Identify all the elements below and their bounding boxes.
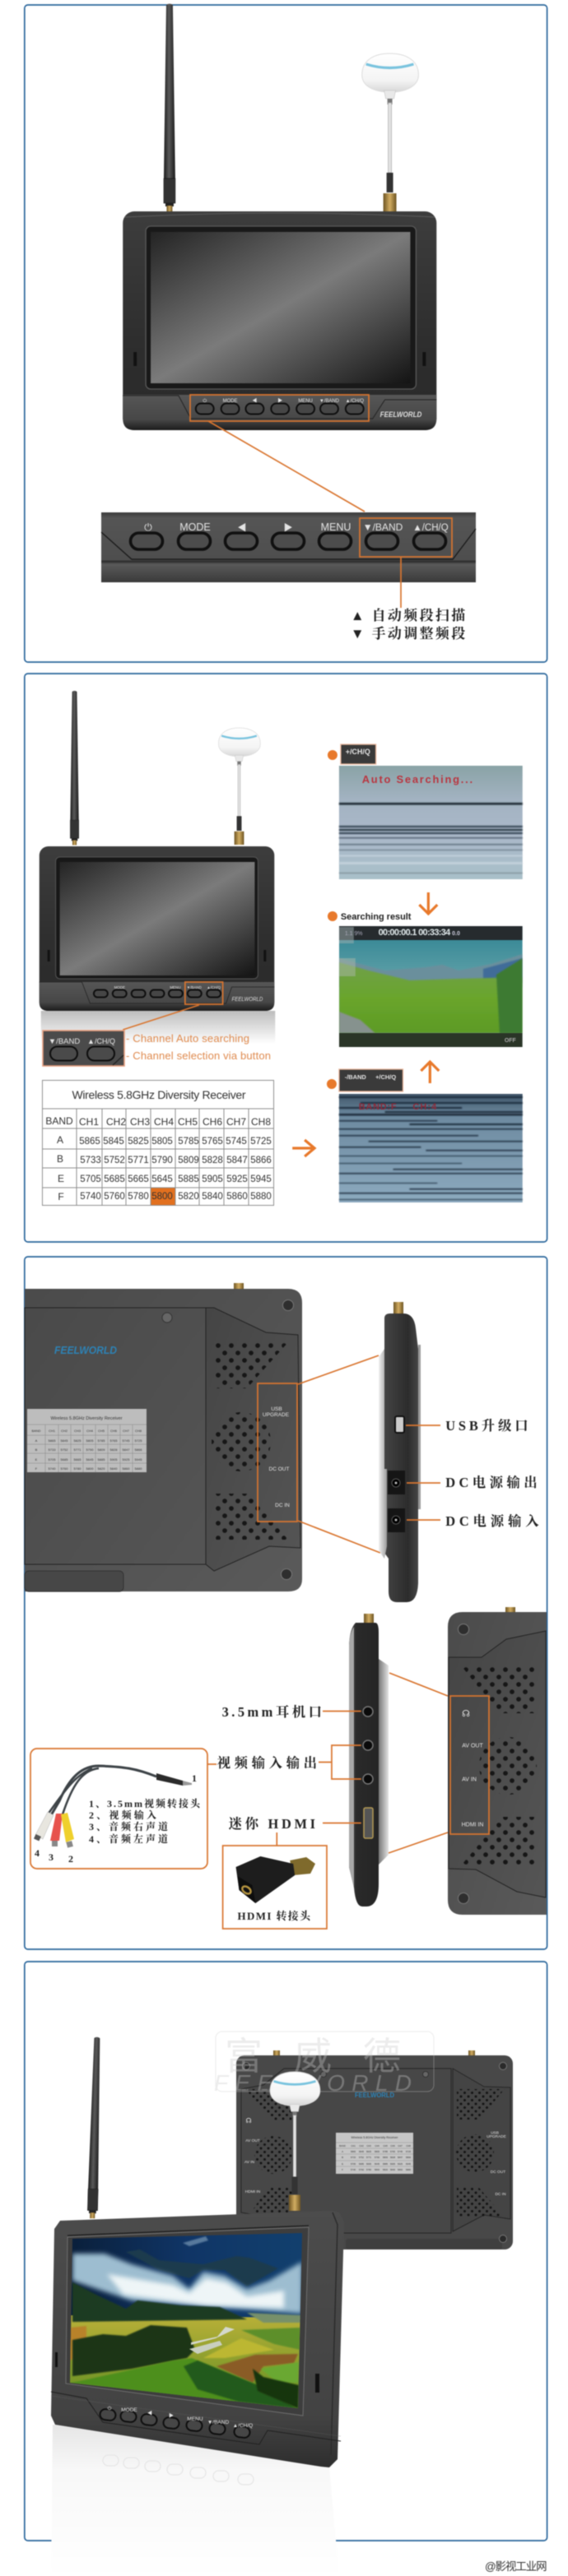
spec label: A: [342, 2150, 343, 2153]
cable legend: 2、视频输入: [89, 1809, 156, 1821]
leaders: rear right to side view: [389, 1673, 448, 1853]
screen: searching result: 00:00:00.1 00:33:34: [379, 928, 451, 938]
spec label: 5825: [74, 1439, 81, 1443]
label: mini hdmi: 迷你 HDMI: [229, 1816, 315, 1832]
spec label: 5685: [359, 2162, 365, 2166]
callout: highlight on BAND CH: [185, 982, 223, 1004]
buttons: ◀: [147, 2411, 152, 2416]
spec label: BAND: [339, 2144, 346, 2147]
monitor back small: [236, 2050, 513, 2249]
usb port: [395, 1416, 404, 1433]
panel: channel searching: [25, 674, 547, 1242]
button strip enlarged: MODE: [179, 521, 211, 533]
screen: searching result: 0.0: [452, 931, 460, 937]
spec label: 5925: [123, 1457, 130, 1462]
spec label: [336, 2133, 413, 2174]
spec label: 5733: [49, 1448, 56, 1452]
callout: AV cable box: [30, 1749, 216, 1869]
monitor back small: DC IN: [495, 2192, 506, 2197]
spec label: 5745: [398, 2150, 403, 2153]
monitor back small: USB: [491, 2130, 499, 2135]
spec label: 5740: [351, 2168, 356, 2171]
spec label: CH5: [98, 1429, 105, 1433]
monitor back: right: AV OUT: [462, 1744, 483, 1749]
button strip enlarged: ▶: [284, 522, 293, 533]
cable legend: 4、音频左声道: [89, 1832, 168, 1845]
spec label: CH6: [390, 2144, 395, 2147]
icon: AV cable: [34, 1766, 192, 1848]
panel: product overview: [25, 1962, 547, 2576]
table: channels: 5847: [226, 1156, 248, 1165]
spec label: 5805: [375, 2150, 380, 2153]
buttons: ⏻: [108, 2406, 112, 2412]
callout: rear port highlight: [258, 1383, 297, 1522]
screen: [60, 862, 254, 975]
spec label: 5785: [98, 1439, 105, 1443]
spec label: 5800: [86, 1466, 94, 1471]
spec label: 5945: [135, 1457, 142, 1462]
monitor front: MENU: [298, 399, 313, 404]
spec label: 5805: [86, 1439, 94, 1443]
caption: english descriptions: - Channel Auto searching: [126, 1032, 249, 1045]
callout: button highlight box: [190, 395, 369, 421]
spec label: 5790: [86, 1448, 94, 1452]
spec label: CH3: [366, 2144, 371, 2147]
spec label: 5820: [98, 1466, 105, 1471]
table: channels: 5765: [202, 1137, 223, 1147]
spec label: 5645: [375, 2162, 380, 2166]
step 3 tag: [327, 1069, 403, 1091]
spec label: B: [342, 2156, 343, 2159]
monitor back small: ☊: [245, 2117, 252, 2124]
spec label: CH4: [86, 1429, 94, 1433]
table: channels: 5805: [151, 1137, 173, 1147]
step 3 tag: +/CH/Q: [375, 1073, 396, 1081]
table: channels: CH4: [154, 1116, 174, 1128]
monitor back: left: DC IN: [275, 1503, 290, 1508]
spec label: 5865: [351, 2150, 356, 2153]
table: channels: 5745: [226, 1137, 247, 1147]
icon: whip antenna: [87, 2037, 102, 2218]
spec label: 5725: [406, 2150, 412, 2153]
buttons: ▼/BAND: [207, 2420, 229, 2425]
table: channels: CH6: [203, 1116, 222, 1128]
screen: auto searching: Auto Searching...: [362, 773, 473, 785]
leaders: side port labels: [406, 1425, 440, 1520]
table: channels: 5925: [226, 1174, 248, 1184]
screen: landscape: [69, 2232, 305, 2410]
spec label: 5800: [375, 2168, 380, 2171]
monitor back small: FEELWORLD: [355, 2092, 394, 2099]
spec label: Wireless 5.8GHz Diversity Receiver: [50, 1416, 123, 1421]
screen: [151, 232, 410, 383]
cable legend: 3、音频右声道: [89, 1820, 168, 1832]
table: channels: 5752: [104, 1156, 125, 1165]
table: channels: 5820: [178, 1192, 199, 1202]
spec label: 5885: [383, 2162, 389, 2166]
screen: auto searching: [339, 766, 523, 879]
table: channels: 5785: [178, 1137, 199, 1147]
spec label: CH4: [375, 2144, 379, 2147]
table: channels: 5825: [128, 1137, 149, 1147]
spec label: 5765: [110, 1439, 118, 1443]
zoomed buttons: [43, 1031, 124, 1066]
monitor front: [123, 211, 436, 430]
spec label: 5725: [135, 1439, 142, 1443]
monitor front: ⏻: [203, 398, 207, 404]
spec label: F: [342, 2168, 343, 2171]
label: mini hdmi: [229, 1816, 361, 1846]
monitor front: ▲/CH/Q: [346, 399, 364, 404]
monitor back: left: FEELWORLD: [54, 1344, 118, 1356]
spec label: 5645: [86, 1457, 94, 1462]
spec label: CH3: [74, 1429, 81, 1433]
spec label: 5905: [390, 2162, 396, 2166]
screen: manual band channel: BAND:F: [359, 1102, 397, 1112]
spec label: 5809: [98, 1448, 105, 1452]
hdmi port: [364, 1808, 373, 1838]
table: channels: 5945: [250, 1174, 272, 1184]
table: channels: CH3: [130, 1116, 150, 1128]
button strip enlarged: ⏻: [144, 521, 152, 533]
monitor back: left: UPGRADE: [263, 1412, 290, 1418]
spec label: CH7: [123, 1429, 130, 1433]
screen: searching result: 1.1 9%: [345, 931, 363, 937]
spec label: 5845: [359, 2150, 365, 2153]
spec label: 5780: [366, 2168, 372, 2171]
icon: whip antenna: [164, 3, 175, 212]
buttons: [100, 2406, 253, 2439]
spec label: CH8: [406, 2144, 411, 2147]
spec label: 5945: [406, 2162, 412, 2166]
step 1 tag: +/CH/Q: [346, 748, 370, 756]
spec label: 5685: [61, 1457, 68, 1462]
buttons: ▲/CH/Q: [233, 2423, 253, 2429]
spec label: 5705: [49, 1457, 56, 1462]
icon: mushroom antenna: [218, 728, 260, 845]
cable legend: [89, 1797, 201, 1845]
table: channels: 5828: [202, 1156, 223, 1165]
screen: searching result: [339, 926, 523, 1047]
spec label: 5847: [123, 1448, 130, 1452]
table: channels: 5771: [128, 1156, 149, 1165]
spec label: 5925: [398, 2162, 403, 2166]
spec label: 5880: [406, 2168, 412, 2171]
button strip enlarged: MENU: [321, 521, 351, 533]
callout: AV cable box: 1: [192, 1772, 197, 1784]
table: channels: 5780: [128, 1192, 149, 1202]
table: channels: 5760: [104, 1192, 125, 1202]
panel: front view with button strip: [25, 3, 547, 662]
audio video jacks: [363, 1707, 373, 1717]
panel: ports: [25, 1257, 547, 1949]
spec label: 5785: [383, 2150, 389, 2153]
screen: manual band channel: [339, 1094, 523, 1202]
monitor front: ▲/CH/Q: [207, 985, 221, 989]
spec label: E: [35, 1457, 38, 1462]
table: channels: CH5: [178, 1116, 198, 1128]
icon: mushroom antenna: [362, 53, 418, 211]
spec label: 5845: [61, 1439, 68, 1443]
table: channels: 5725: [250, 1137, 272, 1147]
table: channels: 5885: [178, 1174, 199, 1184]
monitor back small: HDMI IN: [245, 2189, 261, 2194]
monitor back: right: AV IN: [462, 1777, 477, 1782]
battery cover: [25, 1308, 206, 1564]
icon: HDMI adapter: [236, 1856, 315, 1903]
spec label: 5665: [366, 2162, 372, 2166]
table: channels: BAND: [45, 1115, 73, 1127]
spec label: 5828: [390, 2156, 396, 2159]
spec label: 5866: [406, 2156, 412, 2159]
step 3 tag: -/BAND: [345, 1073, 366, 1081]
table: channels: 5809: [178, 1156, 199, 1165]
table: channels: A: [57, 1134, 63, 1146]
step 1 tag: [328, 744, 376, 764]
table: channels: CH8: [251, 1116, 271, 1128]
spec label: BAND: [31, 1429, 41, 1433]
buttons: ▶: [169, 2413, 174, 2419]
table: channels: 5740: [80, 1192, 101, 1202]
monitor front: FEELWORLD: [380, 410, 422, 419]
caption: english descriptions: [126, 1032, 271, 1062]
table: channels: E: [58, 1173, 64, 1184]
spec label: 5765: [390, 2150, 396, 2153]
button strip enlarged: ◀: [238, 522, 247, 533]
icon: mushroom antenna: [270, 2072, 320, 2211]
callout: HDMI adapter box: HDMI 转接头: [238, 1910, 311, 1922]
label: video in out: 视频输入输出: [217, 1755, 317, 1771]
caption: button functions: ▲ 自动频段扫描: [351, 607, 465, 623]
spec label: 5840: [390, 2168, 396, 2171]
button strip enlarged: [101, 512, 476, 582]
table: channels: 5665: [128, 1174, 149, 1184]
monitor front: FEELWORLD: [232, 997, 263, 1003]
spec label: 5665: [74, 1457, 81, 1462]
table: channels: 5685: [104, 1174, 125, 1184]
button strip enlarged: ▲/CH/Q: [412, 523, 449, 533]
label: DC in: DC电源输入: [445, 1513, 539, 1529]
table: channels: CH1: [79, 1116, 99, 1128]
spec label: 5771: [366, 2156, 372, 2159]
spec label: F: [35, 1466, 38, 1471]
table: channels: B: [57, 1153, 63, 1165]
monitor front: ▼/BAND: [187, 985, 203, 989]
monitor back: right: ☊: [462, 1709, 470, 1719]
zoomed buttons: ▼/BAND: [49, 1037, 80, 1046]
caption: english descriptions: - Channel selection via button: [126, 1049, 271, 1062]
monitor back: right: HDMI IN: [462, 1823, 483, 1828]
table: channels: F: [58, 1191, 64, 1202]
monitor front: MODE: [223, 399, 238, 404]
table: channels: CH2: [106, 1116, 126, 1128]
monitor back small: AV IN: [244, 2160, 255, 2165]
arrow: connector to strip: [208, 421, 365, 512]
watermark: brand: [214, 2032, 434, 2096]
spec label: 5820: [383, 2168, 389, 2171]
watermark: brand: 富威德: [225, 2035, 401, 2078]
arrow: up: [421, 1062, 439, 1083]
table: channels: 5705: [80, 1174, 101, 1184]
table: channels: 5880: [250, 1192, 272, 1202]
monitor back: left: [25, 1283, 302, 1591]
spec label: 5828: [110, 1448, 118, 1452]
monitor front: ◀: [252, 398, 257, 404]
spec label: 5840: [110, 1466, 118, 1471]
spec label: 5780: [74, 1466, 81, 1471]
label: DC out: DC电源输出: [445, 1475, 538, 1490]
monitor front: ▶: [277, 398, 282, 404]
screen: manual band channel: CH:4: [412, 1102, 437, 1112]
monitor front large: [51, 2211, 344, 2467]
spec label: 5860: [398, 2168, 403, 2171]
monitor side view: right: [379, 1302, 421, 1602]
callout: AV cable box: 2: [68, 1853, 73, 1865]
spec label: CH5: [383, 2144, 388, 2147]
monitor back small: AV OUT: [245, 2138, 260, 2143]
spec label: E: [342, 2162, 343, 2166]
callout: HDMI adapter box: [223, 1846, 327, 1929]
spec label: CH6: [110, 1429, 118, 1433]
monitor side view: left: [349, 1614, 389, 1907]
monitor front: [40, 846, 274, 1011]
spec label: 5880: [135, 1466, 142, 1471]
monitor back: left: USB: [271, 1406, 282, 1412]
monitor front: ▼/BAND: [319, 399, 340, 404]
spec label: 5866: [135, 1448, 142, 1452]
dc jacks: [388, 1471, 405, 1494]
label: headphone: 3.5mm耳机口: [222, 1704, 322, 1720]
spec label: 5752: [359, 2156, 365, 2159]
icon: whip antenna: [70, 691, 79, 845]
spec label: 5790: [375, 2156, 380, 2159]
monitor front: MODE: [114, 985, 125, 989]
table: channels: CH7: [226, 1116, 246, 1128]
callout: AV cable box: 3: [49, 1851, 54, 1863]
arrow: table to screens: [292, 1140, 314, 1156]
label: video in out: [217, 1745, 361, 1779]
callout: BAND CH highlight: [360, 518, 452, 557]
spec label: 5760: [61, 1466, 68, 1471]
watermark: site credit: @影视工业网: [485, 2560, 547, 2573]
spec label: A: [35, 1439, 38, 1443]
callout: AV cable box: 4: [35, 1847, 40, 1859]
arrow: leader to caption: [400, 557, 402, 608]
watermark: brand: FEELWORLD: [214, 2070, 412, 2096]
spec label: 5771: [74, 1448, 81, 1452]
caption: button functions: [351, 607, 465, 642]
screen: searching result: OFF: [505, 1038, 516, 1044]
spec label: CH2: [359, 2144, 364, 2147]
spec label: CH2: [61, 1429, 68, 1433]
monitor back small: DC OUT: [491, 2170, 505, 2175]
caption: button functions: ▼ 手动调整频段: [351, 625, 465, 642]
reflection: [51, 2425, 339, 2576]
buttons: MENU: [187, 2416, 203, 2422]
buttons: MODE: [121, 2407, 137, 2413]
table: channels: 5905: [202, 1174, 223, 1184]
spec label: CH7: [398, 2144, 403, 2147]
spec label: [27, 1409, 147, 1472]
speaker grille: [462, 1666, 537, 1865]
spec label: 5825: [366, 2150, 372, 2153]
step 2 label: Searching result: [341, 912, 412, 922]
spec label: CH1: [49, 1429, 56, 1433]
spec label: 5885: [98, 1457, 105, 1462]
monitor back: left: DC OUT: [269, 1466, 289, 1472]
table: channels: 5800: [151, 1192, 173, 1202]
table: channels: 5840: [202, 1192, 223, 1202]
table: channels: Wireless 5.8GHz Diversity Receiver: [72, 1088, 246, 1101]
arrow: down: [419, 892, 437, 914]
spec label: 5847: [398, 2156, 403, 2159]
spec label: 5752: [61, 1448, 68, 1452]
table: channels: 5790: [151, 1156, 173, 1165]
table: channels: 5865: [79, 1137, 100, 1147]
table: channels: 5645: [151, 1174, 173, 1184]
spec label: 5860: [123, 1466, 130, 1471]
table: channels: [43, 1081, 274, 1206]
label: USB: USB升级口: [445, 1418, 528, 1434]
spec label: 5760: [359, 2168, 365, 2171]
callout: side port highlight: [450, 1696, 489, 1834]
monitor back small: UPGRADE: [487, 2134, 506, 2139]
reflection: [41, 1011, 275, 1044]
leaders: rear to side view: [298, 1355, 380, 1553]
spec label: 5809: [383, 2156, 389, 2159]
spec label: CH1: [351, 2144, 356, 2147]
zoomed buttons: ▲/CH/Q: [87, 1037, 115, 1045]
spec label: Wireless 5.8GHz Diversity Receiver: [352, 2136, 398, 2139]
spec label: B: [35, 1448, 38, 1452]
monitor back: right: [448, 1607, 547, 1915]
speaker grille: [212, 1342, 288, 1540]
table: channels: 5733: [80, 1156, 101, 1165]
spec label: 5865: [49, 1439, 56, 1443]
cable legend: 1、3.5mm视频转接头: [89, 1797, 201, 1809]
speaker grilles: [245, 2089, 505, 2217]
spec label: 5705: [351, 2162, 356, 2166]
spec label: 5905: [110, 1457, 118, 1462]
table: channels: 5860: [226, 1192, 248, 1202]
arrow: leader to zoom box: [123, 1005, 199, 1030]
spec label: CH8: [135, 1429, 142, 1433]
spec label: 5733: [351, 2156, 356, 2159]
monitor front: MENU: [170, 985, 180, 989]
table: channels: 5845: [103, 1137, 124, 1147]
spec label: 5740: [49, 1466, 56, 1471]
table: channels: 5866: [250, 1156, 272, 1165]
button strip enlarged: ▼/BAND: [363, 521, 403, 533]
spec label: 5745: [123, 1439, 130, 1443]
